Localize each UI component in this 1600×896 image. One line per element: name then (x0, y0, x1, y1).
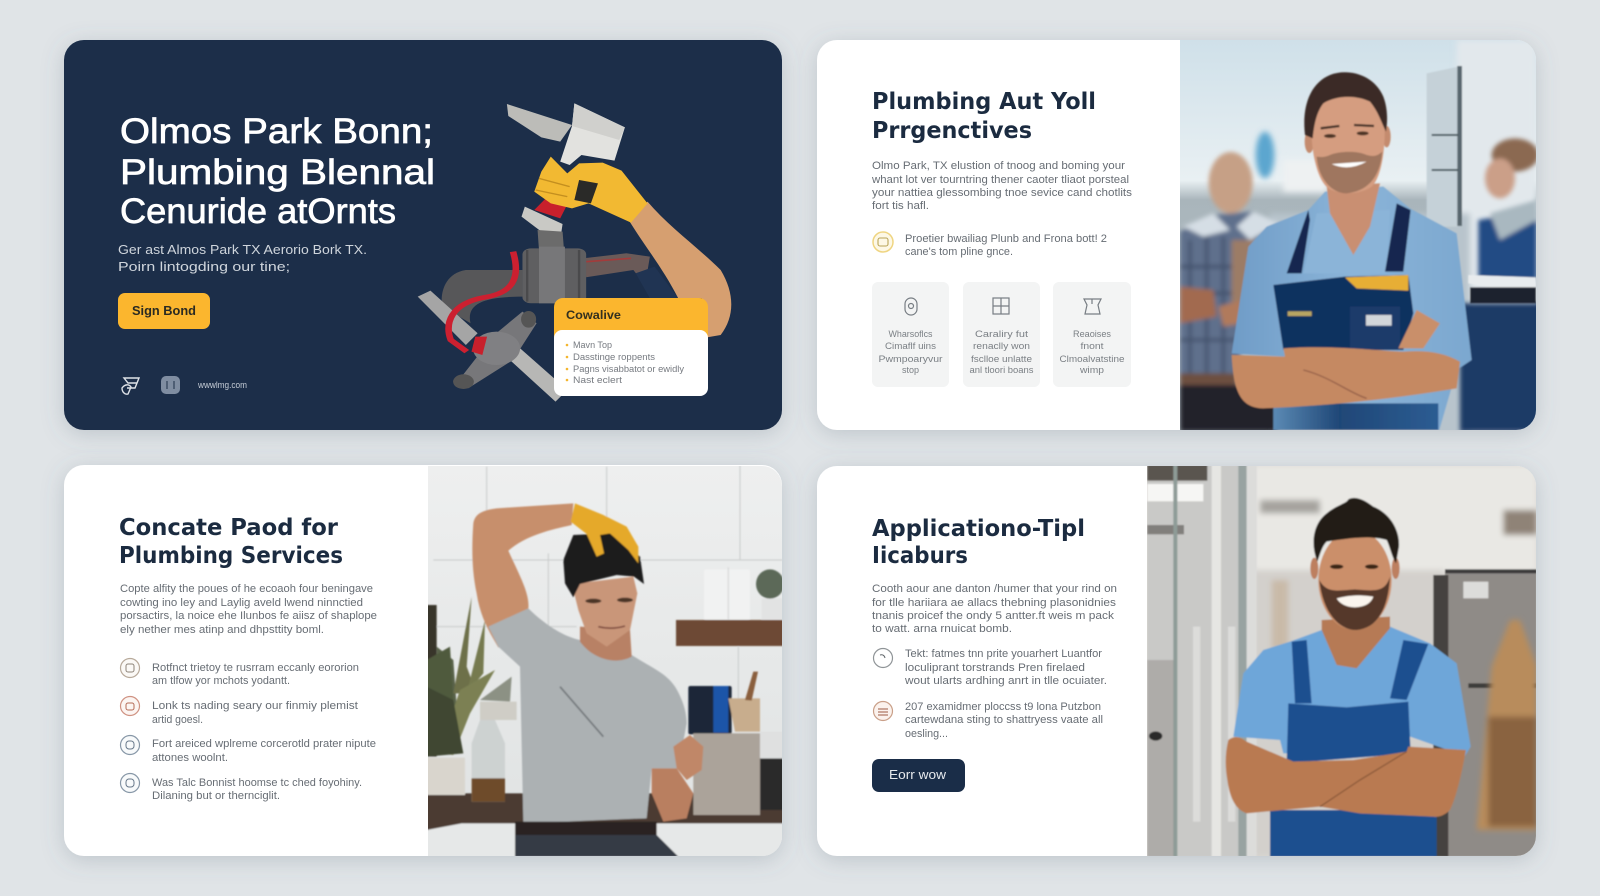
list item 3: Fort areiced wplreme corcerotld prater nipute (152, 738, 376, 750)
heading: Iicaburs (872, 543, 968, 569)
hero subtitle (118, 242, 367, 274)
hero title: Olmos Park Bonn; (120, 112, 433, 151)
paragraph: to watt. arna rnuicat bomb. (872, 623, 1012, 635)
list item 2: artid goesl. (152, 714, 203, 726)
list item 2: cartewdana sting to shattryess vaate all (905, 714, 1103, 726)
photo: smiling plumber with crossed arms (1147, 465, 1537, 857)
list item 2 (874, 701, 1103, 740)
man: crossed arms (1226, 737, 1466, 817)
list item 4 (120, 774, 362, 802)
paragraph: fort tis hafl. (872, 200, 929, 212)
paragraph (872, 583, 1117, 635)
paragraph: Copte alfity the poues of he ecoaoh four beningave (120, 583, 373, 595)
icon: footer badge (161, 376, 180, 394)
right coworker (1460, 138, 1540, 432)
room background (1253, 465, 1537, 857)
hero subtitle: Ger ast Almos Park TX Aerorio Bork TX. (118, 242, 367, 257)
main figure (1232, 187, 1472, 430)
button: edit now: Eorr wow (889, 768, 947, 782)
callout list: Dasstinge roppents (573, 352, 656, 362)
pipe body (538, 230, 564, 250)
feature box 1 (872, 282, 949, 387)
list item 1: am tlfow yor mchots yodantt. (152, 675, 290, 687)
button: sign bond (118, 293, 210, 329)
paragraph: Olmo Park, TX elustion of tnoog and boming your (872, 160, 1125, 172)
heading: Plumbing Services (119, 543, 343, 569)
feature box 1: stop (902, 365, 919, 375)
list item 1: loculiprant torstrands Pren firelaed (905, 662, 1085, 674)
man: glove (571, 503, 638, 563)
glove (534, 157, 648, 223)
feature box 3: Reaoises (1073, 329, 1111, 339)
wall tile lines (434, 466, 782, 698)
man: overalls (1292, 640, 1312, 703)
hammer head (507, 104, 572, 142)
hero title (120, 112, 435, 231)
heading: Concate Paod for (119, 515, 339, 541)
left coworker (1180, 152, 1280, 432)
feature box 2: renaclly won (973, 341, 1030, 351)
paragraph: cowting ino ley and Laylig aveld lwend ninnctied (120, 597, 363, 609)
callout list: Mavn Top (573, 340, 612, 350)
highlight text: Proetier bwailiag Plunb and Frona bott! 2 (905, 233, 1107, 245)
list item 1: wout ularts ardhing anrt in tlle ocuiater. (904, 675, 1107, 687)
photo: plumber with crossed arms and coworkers (1180, 40, 1540, 433)
photo: man in kitchen with gloved hand on head (427, 463, 784, 857)
list item 2 (120, 696, 358, 726)
potted plant (762, 598, 783, 619)
list item 2: oesling... (905, 728, 948, 740)
background blur (1256, 40, 1537, 433)
man: t-shirt (488, 608, 687, 823)
paragraph: for tlle hariiara ae allacs thebning plasonidnies (872, 597, 1117, 609)
paragraph: ely nether mes atinp and dhpsttity boml. (120, 624, 324, 636)
callout list: Nast eclert (573, 375, 623, 385)
man: belt and jeans (515, 822, 657, 835)
feature box 1: Pwmpoaryvur (878, 354, 943, 364)
feature box 2: fsclloe unlatte (971, 354, 1032, 364)
highlight text (905, 233, 1107, 258)
feature box 2 (963, 282, 1040, 387)
icon: shield (905, 298, 917, 315)
list item 1 (120, 658, 359, 687)
counter and cabinets (427, 793, 783, 832)
feature box 3: fnont (1080, 341, 1104, 351)
feature box 3: Clmoalvatstine (1060, 354, 1124, 364)
paragraph: porsactirs, la noice ehe Ilunbos fe aiisz of shaplope (120, 610, 377, 622)
feature box 1: Wharsoflcs (888, 329, 933, 339)
arm (629, 202, 731, 338)
callout list (566, 340, 685, 385)
snake plant (427, 605, 437, 757)
red handle (534, 172, 581, 218)
list item 4: Was Talc Bonnist hoomse tc ched foyohiny. (152, 777, 362, 789)
hero title: Cenuride atOrnts (120, 192, 396, 231)
blue items and boxes (688, 686, 732, 734)
callout card: Cowalive (566, 308, 621, 322)
feature box 3: wimp (1079, 365, 1104, 375)
hammer block (560, 103, 625, 165)
heading: Applicationo-Tipl (872, 516, 1085, 542)
man: neck and face (580, 627, 632, 661)
paragraph: tnanis proicef the ondy 5 antter.ft weis m pack (872, 610, 1115, 622)
man: raised arm (472, 503, 573, 647)
plant pot (427, 758, 465, 795)
paragraph (871, 160, 1133, 212)
callout list: Pagns visabbatot or ewidly (573, 364, 685, 374)
list item 3 (120, 736, 376, 764)
paragraph: whant lot ver tourntring thener caoter tliaot porsteal (871, 174, 1129, 186)
lower pipes (418, 291, 478, 345)
list item 2: Lonk ts nading seary our finmiy plemist (152, 700, 358, 712)
callout card (554, 298, 708, 396)
panel: hero card (64, 40, 782, 430)
panel: contact card (64, 463, 784, 857)
highlight text: cane's tom pline gnce. (905, 246, 1013, 258)
paragraph: your nattiea glessombing tnoe sevice cand chotlits (872, 187, 1133, 199)
feature box 2: anl tloori boans (970, 365, 1034, 375)
icon: footer logo (122, 378, 139, 394)
hero title: Plumbing Blennal (120, 153, 435, 192)
button: sign bond: Sign Bond (132, 303, 196, 318)
heading (119, 515, 343, 569)
list item 4: Dilaning but or thernciglit. (152, 790, 280, 802)
man: hair (563, 533, 644, 597)
list item 1: Tekt: fatmes tnn prite youarhert Luantfor (905, 648, 1102, 660)
paragraph (120, 583, 377, 636)
feature box 2: Caraliry fut (975, 329, 1029, 339)
icon: highlight badge (873, 232, 893, 252)
heading (872, 89, 1096, 144)
icon: grid plan (993, 298, 1009, 314)
list item 1 (874, 648, 1107, 687)
man: forearm and hand (652, 768, 693, 822)
man: t-shirt (1233, 627, 1471, 756)
heading: Plumbing Aut Yoll (872, 89, 1096, 115)
illustration: hand with wrench and pipes (418, 103, 731, 402)
glass jar (472, 720, 505, 802)
feature box 1: Cimaflf uins (885, 341, 937, 351)
paragraph: Cooth aour ane danton /humer that your rind on (872, 583, 1117, 595)
red pipe (449, 252, 516, 352)
icon: people (1084, 299, 1101, 314)
feature box 3 (1053, 282, 1131, 387)
heading (872, 516, 1085, 569)
shelf (676, 620, 783, 646)
hero subtitle: Poirn lintogding our tine; (118, 259, 290, 274)
head (1305, 130, 1314, 153)
panel: perspectives card (817, 40, 1540, 433)
fridge and wooden items (1445, 570, 1537, 857)
button: edit now (872, 759, 965, 792)
list item 2: 207 examidmer ploccss t9 lona Putzbon (905, 701, 1101, 713)
paper rolls (704, 596, 750, 621)
wrench (584, 253, 650, 285)
list item 1: Rotfnct trietoy te rusrram eccanly eororion (152, 662, 359, 674)
clamp (522, 207, 563, 240)
man: neck (1322, 617, 1390, 668)
footer website text: wwwlmg.com (197, 380, 247, 390)
man: head (1310, 558, 1318, 579)
glass doors (1147, 466, 1238, 856)
list item 3: attones woolnt. (152, 752, 228, 764)
panel: application card (817, 465, 1537, 857)
heading: Prrgenctives (872, 118, 1032, 144)
